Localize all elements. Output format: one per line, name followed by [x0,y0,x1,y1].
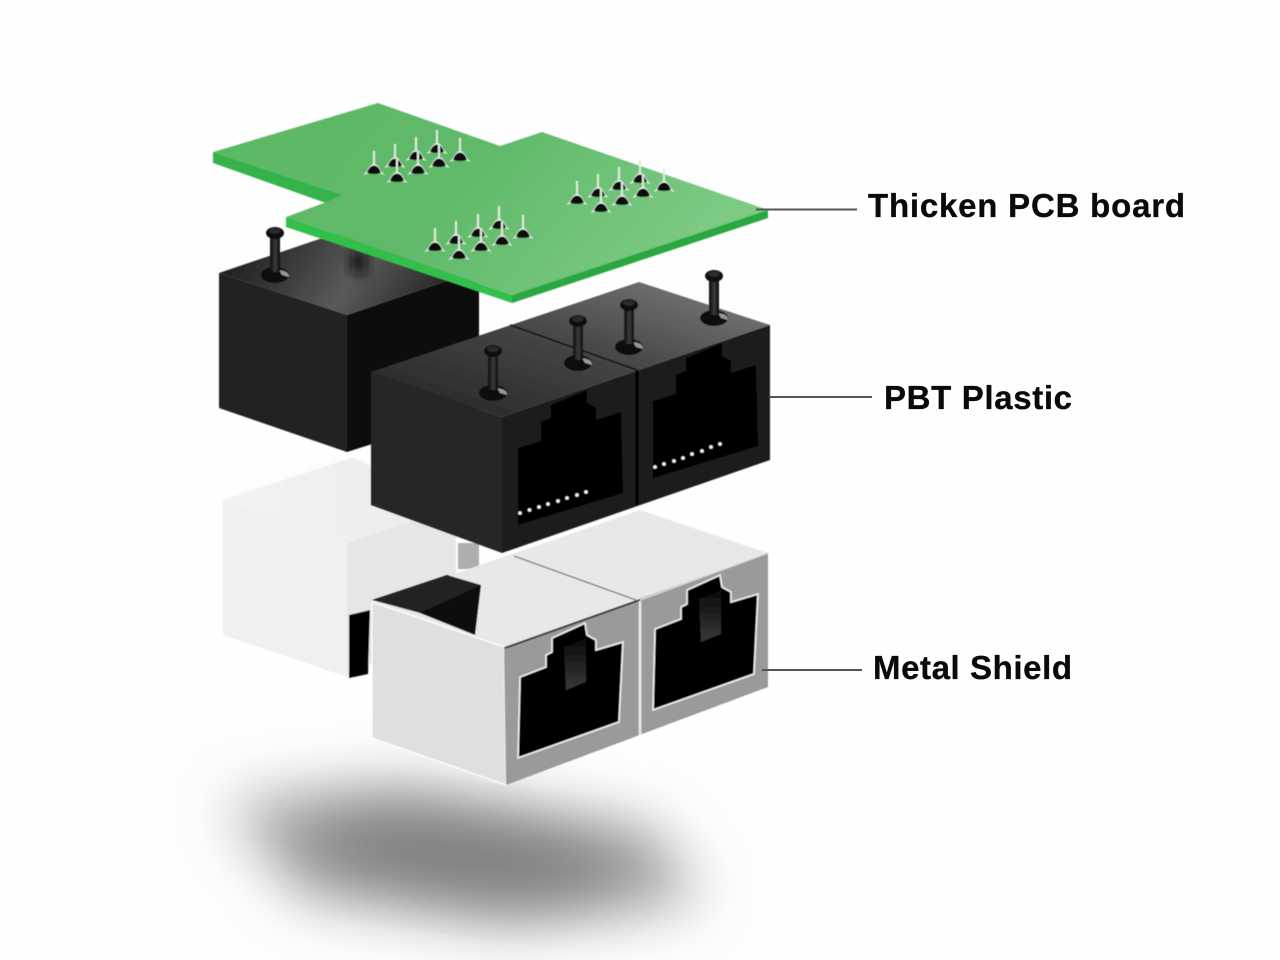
metal shield: rear shell [223,457,479,678]
label: plastic: PBT Plastic [884,379,1072,416]
shield notch [372,575,481,635]
shield side face [372,602,506,785]
rear pin [261,227,289,283]
pin shadow [352,250,366,274]
metal shield: front double shell [372,510,768,785]
shield top face [372,510,768,647]
plastic port right [653,343,758,478]
plastic side face [371,372,502,553]
solder group right [566,160,675,213]
plastic pins [479,270,728,401]
pcb board [213,103,768,303]
pcb edge [213,152,343,203]
ground shadow [228,785,700,925]
pbt plastic: rear housing [219,227,479,452]
pbt plastic: front double housing [371,270,770,553]
plastic top face [371,282,770,417]
pcb top face [213,103,768,295]
shield front face [504,553,768,785]
shield port left [518,623,623,758]
plastic front face [502,325,770,553]
solder group bottom [424,206,534,260]
label: pcb: Thicken PCB board [868,187,1185,224]
solder group top [363,130,471,183]
shield port right [653,575,758,710]
plastic port left [518,390,623,525]
label: shield: Metal Shield [873,649,1072,686]
